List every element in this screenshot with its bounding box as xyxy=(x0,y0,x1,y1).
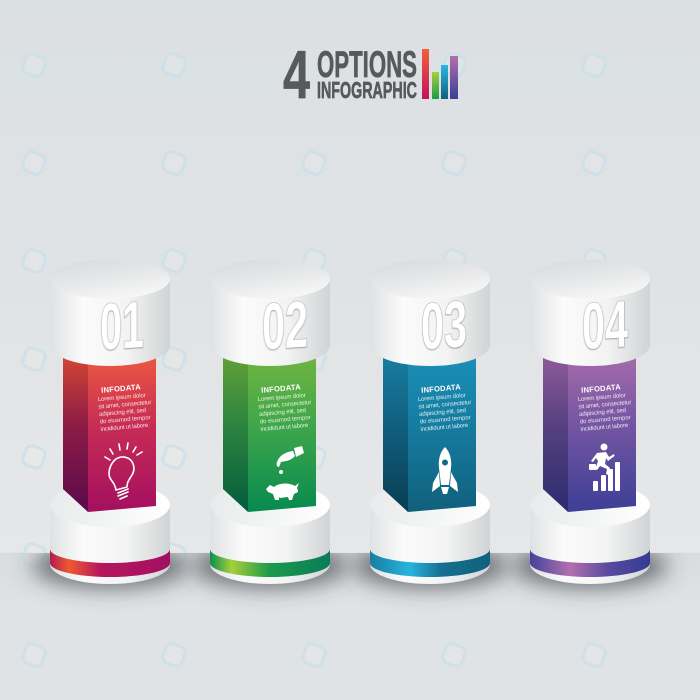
icon: hand and piggy bank xyxy=(266,446,304,500)
colour band xyxy=(530,549,650,577)
body copy: Lorem ipsum dolor xyxy=(98,393,146,403)
box text xyxy=(257,382,314,433)
body copy: do eiusmod tempor xyxy=(420,415,471,426)
top cylinder xyxy=(50,260,170,366)
body copy: sit amet, consectetur xyxy=(98,400,152,411)
column 2 xyxy=(192,260,348,588)
base cylinder xyxy=(370,483,490,584)
body copy: Lorem ipsum dolor xyxy=(578,393,626,403)
heading: INFODATA xyxy=(101,382,141,395)
column 3 xyxy=(352,260,508,588)
body copy: adipiscing elit, sed xyxy=(259,408,306,418)
icon: rocket xyxy=(432,447,458,494)
column 4 xyxy=(512,260,668,588)
icon: running businessman on bars xyxy=(589,444,620,491)
number: 03 xyxy=(421,287,467,365)
number: 04 xyxy=(582,287,628,364)
box left face xyxy=(63,340,88,512)
floor shadow xyxy=(352,544,508,588)
title bar chart icon xyxy=(422,49,458,99)
box right face xyxy=(248,340,316,512)
watermark icons xyxy=(21,52,607,668)
body copy: sit amet, consectetur xyxy=(418,400,472,411)
box right face xyxy=(408,340,476,512)
body copy: adipiscing elit, sed xyxy=(419,408,466,418)
heading: INFODATA xyxy=(581,382,621,395)
body copy xyxy=(578,392,634,433)
top cylinder xyxy=(530,260,650,366)
floor shadow xyxy=(192,544,348,588)
column 1 xyxy=(32,260,188,588)
number: 02 xyxy=(262,288,308,365)
body copy: sit amet, consectetur xyxy=(258,400,312,411)
body copy xyxy=(418,392,474,433)
box text xyxy=(417,382,474,433)
body copy: incididunt ut labore xyxy=(260,423,309,433)
title line: options: OPTIONS xyxy=(317,44,417,85)
colour band xyxy=(210,549,330,577)
colour band xyxy=(370,549,490,577)
floor shadow xyxy=(512,544,668,588)
body copy: incididunt ut labore xyxy=(100,423,149,433)
body copy: adipiscing elit, sed xyxy=(579,408,626,418)
colour band xyxy=(50,549,170,577)
body copy: adipiscing elit, sed xyxy=(99,408,146,418)
body copy: incididunt ut labore xyxy=(580,423,629,433)
top cylinder xyxy=(210,260,330,366)
body copy xyxy=(258,392,314,433)
box left face xyxy=(543,340,568,512)
title numeral: 4 xyxy=(283,37,310,113)
box text xyxy=(577,382,634,433)
box text xyxy=(97,382,154,433)
body copy xyxy=(98,392,154,433)
box right face xyxy=(88,340,156,512)
heading: INFODATA xyxy=(421,382,461,395)
box left face xyxy=(383,340,408,512)
title xyxy=(283,37,458,113)
icon: light bulb xyxy=(105,443,142,499)
number: 01 xyxy=(100,288,144,365)
box left face xyxy=(223,340,248,512)
top cylinder xyxy=(370,260,490,366)
body copy: Lorem ipsum dolor xyxy=(258,393,306,403)
base cylinder xyxy=(50,483,170,584)
box right face xyxy=(568,340,636,512)
body copy: incididunt ut labore xyxy=(420,423,469,433)
body copy: do eiusmod tempor xyxy=(260,415,311,426)
body copy: Lorem ipsum dolor xyxy=(418,393,466,403)
base cylinder xyxy=(210,483,330,584)
heading: INFODATA xyxy=(261,382,301,395)
floor shadow xyxy=(32,544,188,588)
body copy: do eiusmod tempor xyxy=(100,415,151,426)
body copy: sit amet, consectetur xyxy=(578,400,632,411)
body copy: do eiusmod tempor xyxy=(580,415,631,426)
base cylinder xyxy=(530,483,650,584)
title line: infographic: INFOGRAPHIC xyxy=(317,77,417,103)
